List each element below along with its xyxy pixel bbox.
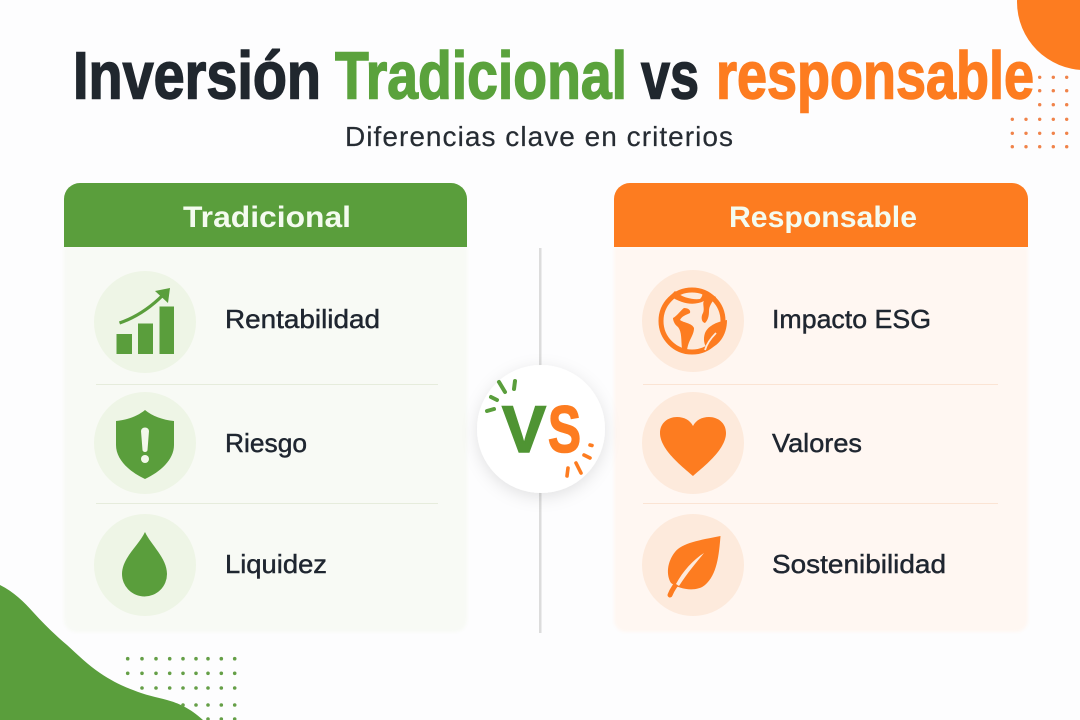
panel header: Responsable: Responsable xyxy=(729,201,917,234)
title: Tradicional xyxy=(335,40,627,114)
decoration: green corner blob xyxy=(0,585,203,720)
row: Rentabilidad xyxy=(94,271,380,373)
icon: growth bars with arrow xyxy=(116,288,174,354)
icon: leaf xyxy=(668,536,720,595)
row: Sostenibilidad: Sostenibilidad xyxy=(772,549,946,579)
icon: water drop xyxy=(122,532,167,596)
row: Liquidez: Liquidez xyxy=(225,549,327,579)
row: Riesgo: Riesgo xyxy=(225,428,307,458)
subtitle: Diferencias clave en criterios xyxy=(345,121,733,152)
VS letters xyxy=(502,392,581,466)
panel: Responsable xyxy=(614,183,1028,632)
row: Sostenibilidad xyxy=(642,514,946,616)
center divider line xyxy=(539,248,542,633)
VS letters: S xyxy=(548,392,581,466)
row: Impacto ESG: Impacto ESG xyxy=(772,304,931,334)
decoration: orange corner circle xyxy=(1017,0,1080,70)
panel header: Tradicional xyxy=(64,183,467,247)
row: Liquidez xyxy=(94,514,327,616)
decoration: orange dot grid xyxy=(1011,76,1068,148)
row: Riesgo xyxy=(94,392,307,494)
icon: heart xyxy=(660,417,726,476)
panel header: Tradicional: Tradicional xyxy=(183,201,351,234)
green sparks xyxy=(487,381,515,411)
decoration: green dot grid xyxy=(126,657,236,720)
title: vs xyxy=(641,40,699,114)
panel header: Responsable xyxy=(614,183,1028,247)
panel body: Responsable xyxy=(614,247,1028,632)
VS badge xyxy=(477,365,605,493)
VS letters: V xyxy=(502,392,546,466)
row: Impacto ESG xyxy=(642,270,931,372)
row: Valores: Valores xyxy=(772,428,862,458)
icon: globe with leaf xyxy=(661,289,727,352)
orange sparks xyxy=(567,445,592,476)
row: Valores xyxy=(642,392,862,494)
title: Inversión xyxy=(73,40,321,114)
panel body: Tradicional xyxy=(64,247,467,632)
row: Rentabilidad: Rentabilidad xyxy=(225,304,380,334)
icon: shield with exclamation xyxy=(116,410,174,479)
title xyxy=(73,40,1034,114)
panel: Tradicional xyxy=(64,183,467,632)
